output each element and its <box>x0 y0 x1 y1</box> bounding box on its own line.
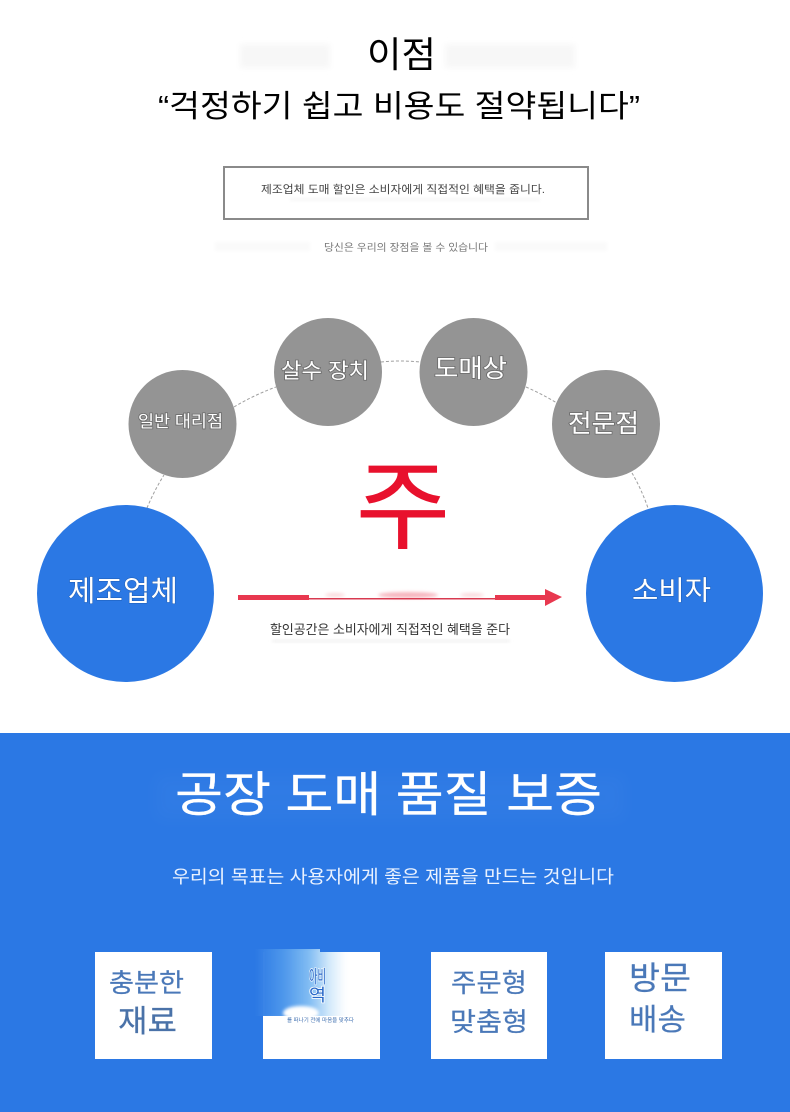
circle: 도매상: 도매상 <box>434 355 507 383</box>
card: cloud image with text: 아비 <box>309 967 326 987</box>
circle: 일반 대리점 <box>128 370 236 478</box>
circle: 도매상 <box>420 318 528 426</box>
circle: 전문점 <box>552 370 660 478</box>
arrow: manufacturer to consumer <box>238 589 562 606</box>
text box: manufacturer discount: 제조업체 도매 할인은 소비자에게 직접적인 혜택을 줍니다. <box>261 183 545 196</box>
circle: 살수 장치 <box>274 318 382 426</box>
big red character: 주 <box>356 453 450 562</box>
card: home delivery: 배송 <box>629 1004 686 1037</box>
faint background residue behind title <box>240 44 575 68</box>
circle: 제조업체 <box>37 505 214 682</box>
circle: 제조업체: 제조업체 <box>68 575 178 608</box>
circle: 살수 장치: 살수 장치 <box>281 360 369 383</box>
panel: quality guarantee <box>0 733 790 1112</box>
caption: see our advantages: 당신은 우리의 장점을 볼 수 있습니다 <box>324 242 488 254</box>
circle: 소비자: 소비자 <box>632 576 711 606</box>
heading: factory wholesale quality: 공장 도매 품질 보증 <box>175 769 602 822</box>
circle: 전문점: 전문점 <box>568 410 639 438</box>
subheading: our goal: 우리의 목표는 사용자에게 좋은 제품을 만드는 것입니다 <box>172 867 614 887</box>
card: sufficient material: 재료 <box>118 1004 177 1039</box>
caption: discount space: 할인공간은 소비자에게 직접적인 혜택을 준다 <box>270 622 510 637</box>
card: cloud image with text: 역 <box>309 986 326 1005</box>
dashed arc connecting circles <box>147 361 649 511</box>
text box: manufacturer discount <box>224 167 588 219</box>
subtitle: “걱정하기 쉽고 비용도 절약됩니다” <box>158 89 640 124</box>
card: home delivery <box>605 952 722 1059</box>
card: sufficient material: 충분한 <box>109 968 184 998</box>
card: custom order: 주문형 <box>451 968 527 998</box>
circle: 일반 대리점: 일반 대리점 <box>138 412 223 431</box>
card: custom order <box>431 952 547 1059</box>
card: cloud image with text <box>258 945 380 1059</box>
faint residue beside caption <box>215 242 607 251</box>
title: 이점: 이점 <box>367 34 436 75</box>
circle: 소비자 <box>586 505 763 682</box>
card: cloud image with text: 를 떠나기 전에 마음을 맞추다 <box>287 1016 354 1024</box>
card: home delivery: 방문 <box>629 960 691 996</box>
card: custom order: 맞춤형 <box>450 1007 528 1037</box>
card: sufficient material <box>95 952 212 1059</box>
